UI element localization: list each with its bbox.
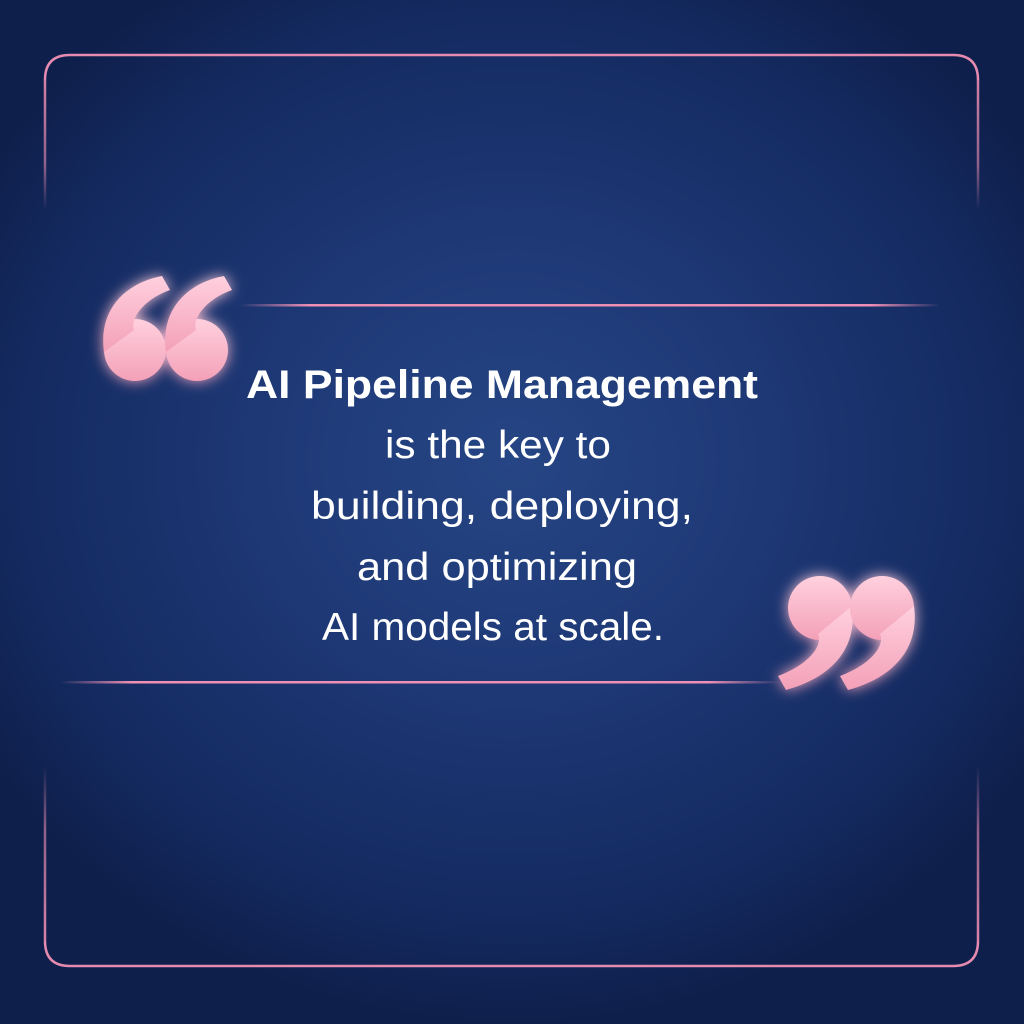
quote text: building, deploying, [311, 485, 693, 528]
quote text: is the key to [385, 424, 611, 467]
quote text: AI Pipeline Management [246, 363, 758, 407]
icon: opening quote [103, 276, 232, 381]
top divider line [240, 304, 940, 306]
bottom divider line [60, 681, 780, 684]
quote text [246, 363, 758, 649]
quote text: AI models at scale. [322, 606, 664, 649]
quote text: and optimizing [357, 546, 637, 589]
icon: closing quote [778, 576, 915, 690]
